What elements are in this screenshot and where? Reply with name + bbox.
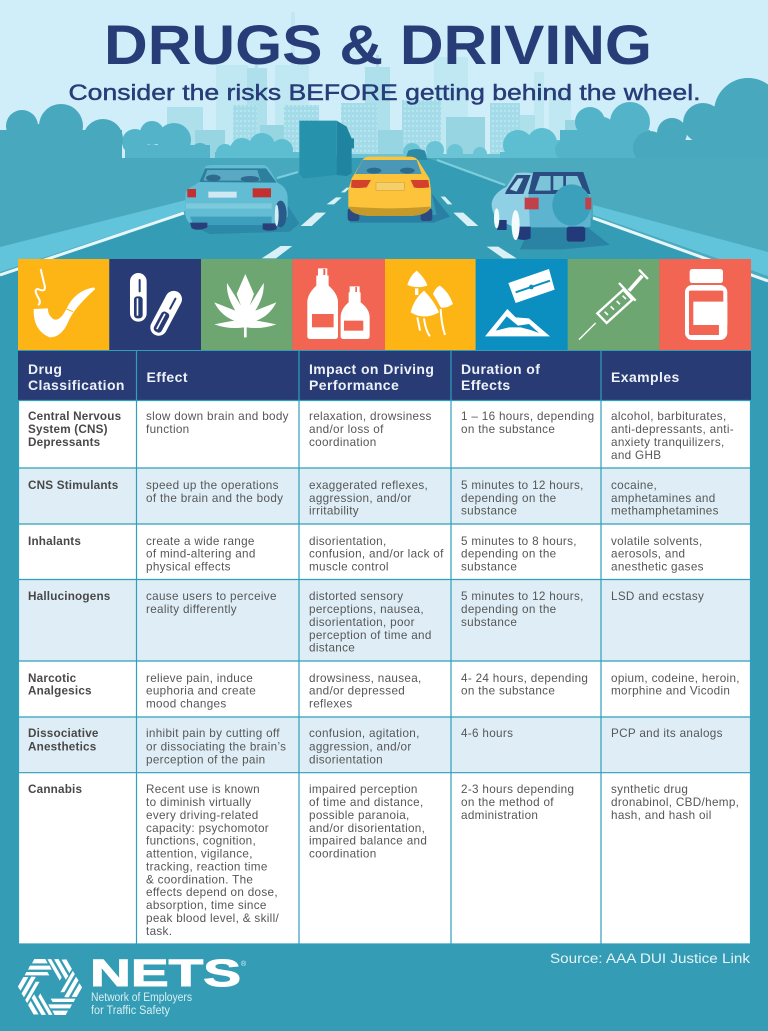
row: CNS stimulants: methamphetamines bbox=[611, 504, 719, 518]
row: cannabis: task. bbox=[146, 925, 172, 938]
row: CNS stimulants: of the brain and the body bbox=[146, 492, 283, 505]
row: CNS stimulants: speed up the operations bbox=[146, 479, 279, 492]
header: drug classification: Drug bbox=[28, 361, 62, 377]
trees: mid layer bbox=[215, 128, 570, 162]
row: CNS stimulants: depending on the bbox=[461, 492, 556, 505]
row: narcotic analgesics: on the substance bbox=[461, 684, 555, 698]
row: CNS depressants: function bbox=[146, 423, 190, 436]
row: narcotic analgesics: 4- 24 hours, depending bbox=[461, 672, 588, 685]
trees: front layer bbox=[0, 78, 768, 176]
icon: razor blade and powder bbox=[485, 269, 555, 336]
row: cannabis: attention, vigilance, bbox=[146, 848, 253, 860]
icon: pipe bbox=[34, 269, 95, 337]
row: CNS depressants: coordination bbox=[309, 436, 377, 449]
header road scene illustration bbox=[0, 0, 768, 400]
header: impact: Performance bbox=[309, 377, 399, 393]
row: hallucinogens: distorted sensory bbox=[309, 590, 403, 603]
right icons bbox=[407, 269, 727, 340]
lane dashes bbox=[262, 188, 517, 258]
row: hallucinogens: disorientation, poor bbox=[309, 616, 415, 629]
row: CNS depressants bbox=[28, 410, 734, 462]
row: CNS stimulants: CNS Stimulants bbox=[28, 479, 119, 492]
row: inhalants: physical effects bbox=[146, 560, 231, 574]
logo wordmark: NETS bbox=[90, 953, 241, 995]
row: dissociative anesthetics: inhibit pain by cutting off bbox=[146, 727, 280, 740]
car: blue SUV bbox=[492, 172, 610, 249]
table header row bbox=[18, 351, 751, 400]
row: CNS depressants: anxiety tranquilizers, bbox=[611, 436, 725, 449]
icon: liquor bottles bbox=[307, 268, 370, 339]
row: dissociative anesthetics: 4-6 hours bbox=[461, 727, 513, 740]
row: cannabis: tracking, reaction time bbox=[146, 860, 268, 874]
row: CNS stimulants: cocaine, bbox=[611, 479, 657, 492]
row: dissociative anesthetics: or dissociating the brain’s bbox=[146, 740, 286, 754]
truck bbox=[299, 121, 354, 178]
row: CNS stimulants: substance bbox=[461, 504, 517, 518]
table row backgrounds bbox=[18, 400, 751, 944]
row: CNS depressants: System (CNS) bbox=[28, 423, 108, 436]
row: inhalants: anesthetic gases bbox=[611, 560, 704, 574]
row: narcotic analgesics: morphine and Vicodin bbox=[611, 684, 730, 698]
row: cannabis: and/or disorientation, bbox=[309, 822, 425, 835]
title: DRUGS & DRIVING bbox=[104, 13, 652, 76]
distant car bbox=[405, 149, 427, 160]
row: narcotic analgesics: reflexes bbox=[309, 698, 352, 710]
row: CNS depressants: and GHB bbox=[611, 449, 661, 462]
row: inhalants: confusion, and/or lack of bbox=[309, 548, 444, 560]
row: narcotic analgesics: opium, codeine, heroin, bbox=[611, 672, 740, 685]
row: CNS depressants: 1 – 16 hours, depending bbox=[461, 410, 594, 423]
row: CNS stimulants: amphetamines and bbox=[611, 492, 716, 505]
row: CNS depressants: alcohol, barbiturates, bbox=[611, 410, 727, 423]
row: cannabis: impaired perception bbox=[309, 783, 418, 796]
table bbox=[18, 351, 751, 944]
row: narcotic analgesics: relieve pain, induce bbox=[146, 672, 253, 685]
tile backgrounds bbox=[18, 259, 751, 350]
row: cannabis bbox=[28, 783, 739, 938]
row: hallucinogens: distance bbox=[309, 642, 355, 654]
row: hallucinogens: LSD and ecstasy bbox=[611, 590, 704, 603]
row: cannabis: to diminish virtually bbox=[146, 796, 251, 809]
icon: pill bottle bbox=[685, 269, 727, 340]
row: cannabis: absorption, time since bbox=[146, 899, 267, 912]
row: dissociative anesthetics: Anesthetics bbox=[28, 740, 97, 754]
row: cannabis: administration bbox=[461, 809, 538, 822]
source credit: Source: AAA DUI Justice Link bbox=[550, 951, 750, 966]
logo mark: woven hexagon bbox=[13, 951, 87, 1023]
row: dissociative anesthetics: PCP and its analogs bbox=[611, 727, 723, 740]
subtitle: Consider the risks BEFORE getting behind the wheel. bbox=[68, 80, 700, 105]
row: inhalants: volatile solvents, bbox=[611, 535, 703, 548]
row: hallucinogens: substance bbox=[461, 616, 517, 629]
left icons bbox=[34, 268, 370, 339]
row: cannabis: coordination bbox=[309, 848, 377, 860]
row: cannabis: & coordination. The bbox=[146, 874, 253, 886]
row: dissociative anesthetics: disorientation bbox=[309, 754, 383, 766]
row: cannabis: on the method of bbox=[461, 796, 554, 809]
row: cannabis: of time and distance, bbox=[309, 796, 424, 809]
row: dissociative anesthetics: aggression, and/or bbox=[309, 740, 412, 754]
row: hallucinogens: perception of time and bbox=[309, 629, 432, 642]
row: hallucinogens bbox=[28, 590, 704, 654]
row: narcotic analgesics: mood changes bbox=[146, 698, 227, 710]
logo tagline: Network of Employers bbox=[91, 992, 192, 1004]
row: narcotic analgesics: euphoria and create bbox=[146, 684, 256, 698]
row: narcotic analgesics: and/or depressed bbox=[309, 684, 405, 698]
row: inhalants: depending on the bbox=[461, 548, 556, 560]
row: cannabis: functions, cognition, bbox=[146, 834, 256, 848]
row: hallucinogens: depending on the bbox=[461, 603, 556, 616]
row: hallucinogens: 5 minutes to 12 hours, bbox=[461, 590, 584, 603]
roadside ground bbox=[0, 158, 345, 280]
registered mark: ® bbox=[241, 960, 247, 968]
row: hallucinogens: cause users to perceive bbox=[146, 590, 277, 603]
vehicles bbox=[185, 121, 610, 249]
row: cannabis: capacity: psychomotor bbox=[146, 822, 269, 835]
row: CNS depressants: slow down brain and body bbox=[146, 410, 289, 423]
logo tagline: for Traffic Safety bbox=[91, 1005, 170, 1017]
row: CNS stimulants: aggression, and/or bbox=[309, 492, 412, 505]
row: CNS depressants: and/or loss of bbox=[309, 423, 384, 436]
row: CNS stimulants: 5 minutes to 12 hours, bbox=[461, 479, 584, 492]
row: inhalants: of mind-altering and bbox=[146, 548, 256, 560]
row: inhalants: 5 minutes to 8 hours, bbox=[461, 535, 577, 548]
row: inhalants: create a wide range bbox=[146, 535, 255, 548]
row: dissociative anesthetics bbox=[28, 727, 723, 766]
row: CNS stimulants: exaggerated reflexes, bbox=[309, 479, 428, 492]
road surface bbox=[0, 158, 768, 400]
row: CNS stimulants bbox=[28, 479, 719, 518]
row: dissociative anesthetics: Dissociative bbox=[28, 727, 99, 740]
row: narcotic analgesics bbox=[28, 672, 740, 710]
row: narcotic analgesics: Analgesics bbox=[28, 684, 92, 698]
row: inhalants: disorientation, bbox=[309, 535, 387, 548]
row: cannabis: effects depend on dose, bbox=[146, 886, 278, 899]
row: cannabis: every driving-related bbox=[146, 809, 259, 822]
row: inhalants bbox=[28, 535, 704, 574]
road shoulders bbox=[0, 200, 186, 272]
row: hallucinogens: reality differently bbox=[146, 603, 237, 616]
NETS logo bbox=[13, 951, 247, 1023]
row: cannabis: possible paranoia, bbox=[309, 809, 410, 822]
row: dissociative anesthetics: confusion, agitation, bbox=[309, 727, 420, 740]
icon: capsules bbox=[130, 273, 185, 339]
row: cannabis: impaired balance and bbox=[309, 834, 427, 848]
row: narcotic analgesics: Narcotic bbox=[28, 672, 77, 685]
icon: syringe bbox=[579, 270, 648, 340]
header: impact: Impact on Driving bbox=[309, 361, 434, 377]
row: cannabis: dronabinol, CBD/hemp, bbox=[611, 796, 739, 809]
row: CNS stimulants: irritability bbox=[309, 504, 359, 518]
header: duration: Effects bbox=[461, 377, 511, 393]
row: hallucinogens: Hallucinogens bbox=[28, 590, 111, 603]
row: cannabis: peak blood level, & skill/ bbox=[146, 912, 279, 925]
row: CNS depressants: on the substance bbox=[461, 423, 555, 436]
row: inhalants: Inhalants bbox=[28, 535, 81, 548]
row: inhalants: aerosols, and bbox=[611, 548, 685, 560]
header: drug classification: Classification bbox=[28, 377, 125, 393]
icon: cannabis leaf bbox=[214, 274, 276, 337]
row: cannabis: hash, and hash oil bbox=[611, 809, 712, 822]
car: yellow hatchback bbox=[348, 157, 450, 223]
lane lines bbox=[0, 213, 768, 281]
row: cannabis: Cannabis bbox=[28, 783, 83, 796]
row: narcotic analgesics: drowsiness, nausea, bbox=[309, 672, 422, 685]
row: CNS depressants: anti-depressants, anti- bbox=[611, 423, 734, 436]
row: hallucinogens: perceptions, nausea, bbox=[309, 603, 424, 616]
row: cannabis: synthetic drug bbox=[611, 783, 688, 796]
car: blue sedan bbox=[185, 165, 299, 234]
header: duration: Duration of bbox=[461, 361, 540, 377]
header: examples: Examples bbox=[611, 369, 680, 385]
row: CNS depressants: Central Nervous bbox=[28, 410, 122, 423]
row: CNS depressants: relaxation, drowsiness bbox=[309, 410, 432, 423]
row: dissociative anesthetics: perception of the pain bbox=[146, 754, 265, 766]
row: CNS depressants: Depressants bbox=[28, 436, 101, 449]
row: cannabis: 2-3 hours depending bbox=[461, 783, 574, 796]
row: inhalants: muscle control bbox=[309, 560, 389, 574]
row: cannabis: Recent use is known bbox=[146, 783, 260, 796]
header: effect: Effect bbox=[146, 369, 188, 385]
icon strip bbox=[18, 259, 751, 350]
row: inhalants: substance bbox=[461, 560, 517, 574]
icon: mushrooms bbox=[407, 271, 453, 336]
